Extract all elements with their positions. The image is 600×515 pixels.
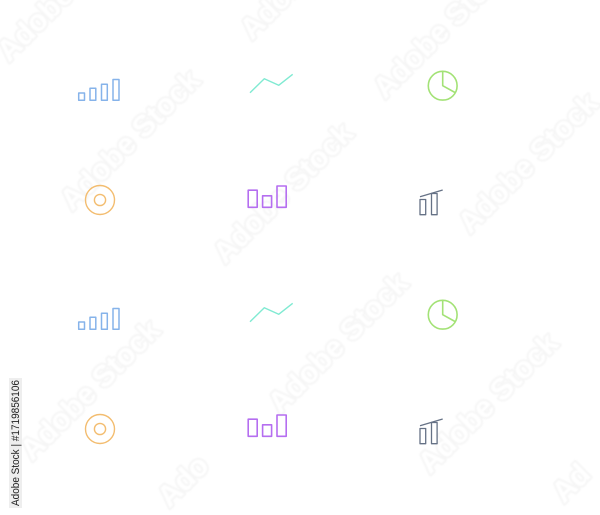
icon: purple bars, second set — [248, 415, 286, 436]
icon: orange target, second set — [86, 414, 114, 444]
icon: teal line chart, second set — [250, 303, 293, 322]
icon: blue signal bars, second set — [79, 308, 119, 329]
watermark: repeated Adobe Stock text: Ad — [545, 457, 597, 509]
stock id label: Adobe Stock | #1719856106 — [10, 380, 22, 506]
watermark: repeated Adobe Stock text: Adobe Stock — [207, 117, 360, 270]
watermark: repeated Adobe Stock text: Adobe Stock — [54, 64, 207, 217]
icon: green pie chart — [428, 71, 457, 100]
icon: orange target — [86, 186, 114, 214]
icon: purple bars — [248, 186, 286, 207]
icon: blue signal bars — [79, 80, 119, 100]
watermark: repeated Adobe Stock text: Ado — [151, 449, 216, 514]
watermark: repeated Adobe Stock text: Adobe Stock — [262, 267, 415, 420]
watermark: repeated Adobe Stock text: Adobe Stock — [14, 314, 167, 467]
icon: teal line chart — [250, 74, 293, 93]
icon: grey bars with trend line, second set — [420, 419, 443, 444]
watermark: repeated Adobe Stock text: Adobe Stock — [412, 327, 565, 480]
icon: green pie chart, second set — [428, 300, 457, 329]
icon: grey bars with trend line — [420, 190, 443, 215]
